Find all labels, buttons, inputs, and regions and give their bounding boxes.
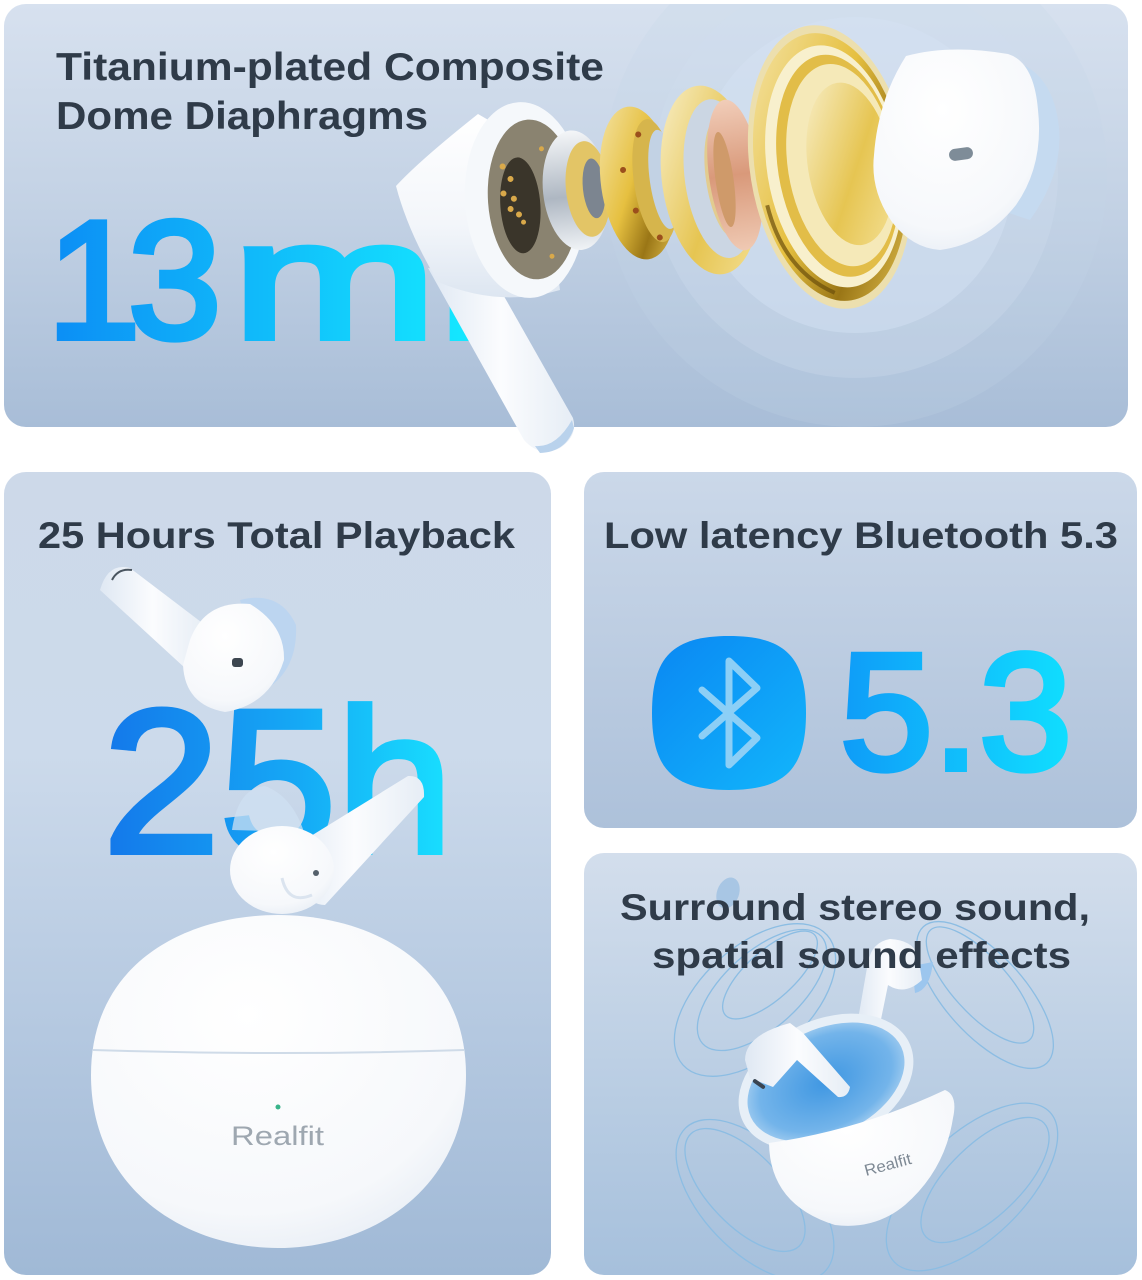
big number: 13mm: mm: [232, 186, 642, 374]
panel: 25 hours playback: [4, 472, 551, 1275]
white ear cap: [873, 49, 1039, 250]
heading: surround sound: spatial sound effects: [652, 935, 1071, 976]
earbud stem: [428, 268, 574, 452]
copper voice coil: [699, 96, 771, 254]
panel: bluetooth 5.3: [584, 472, 1137, 828]
lower earbud: [230, 776, 424, 914]
gold dome diaphragm: [729, 13, 931, 321]
sound wave ellipses: [674, 920, 1058, 1275]
upper earbud: [100, 567, 296, 712]
big number: 13mm: 13: [47, 186, 221, 374]
heading: surround sound: [620, 887, 1090, 976]
earbud ring and circuit board: [458, 98, 592, 302]
charging case: [91, 915, 466, 1248]
brand name: Realfit: [863, 1151, 914, 1180]
heading: surround sound: Surround stereo sound,: [620, 887, 1090, 928]
earbud in case: [745, 1023, 850, 1097]
heading: titanium diaphragms: Dome Diaphragms: [56, 95, 428, 138]
panel: titanium diaphragms: [4, 0, 1128, 453]
case lid with blue interior: [716, 987, 936, 1177]
heading: titanium diaphragms: Titanium-plated Composite: [56, 46, 604, 89]
heading: titanium diaphragms: [56, 46, 604, 138]
heading: bluetooth: Low latency Bluetooth 5.3: [604, 515, 1118, 556]
heading: 25 hours: 25 Hours Total Playback: [38, 515, 515, 556]
floating earbud: [912, 962, 933, 993]
exploded earbud illustration: [396, 13, 1059, 453]
small flying earbud: [712, 874, 744, 912]
microphone slot: [948, 146, 974, 162]
case base: [769, 1090, 954, 1226]
big number: 13mm: [56, 218, 469, 343]
status light: [276, 1104, 280, 1110]
panel: surround sound: [584, 853, 1137, 1280]
big number: 5.3: 5.3: [840, 620, 1072, 805]
thin gold ring: [649, 79, 771, 281]
sound wave rings: [689, 214, 1020, 378]
brand name: Realfit: [231, 1121, 325, 1151]
blue ear tip: [1000, 60, 1059, 220]
big number: 25h: 25h: [103, 668, 453, 896]
gold ring: [591, 101, 688, 264]
icon: bluetooth: [652, 636, 806, 790]
silver ring: [537, 127, 616, 253]
open charging case with earbuds: [716, 939, 954, 1226]
earbud body: [396, 114, 560, 297]
